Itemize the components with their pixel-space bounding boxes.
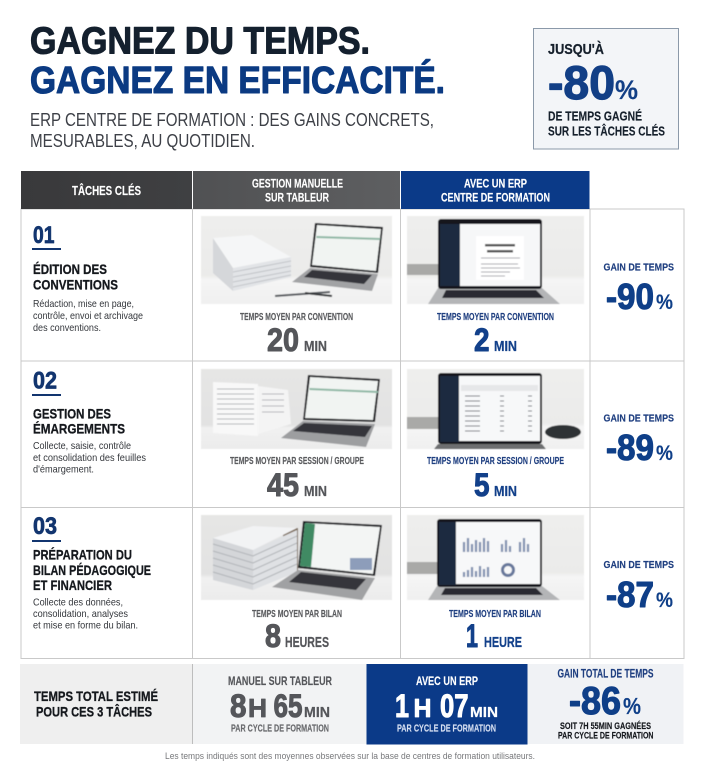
row 1 task description: 01 xyxy=(33,222,54,249)
row 1 image: paper stack and spreadsheet laptop xyxy=(201,216,392,304)
row 2 gain: -89 xyxy=(606,427,654,468)
total: manual: MANUEL SUR TABLEUR xyxy=(228,674,332,688)
total: manual: PAR CYCLE DE FORMATION xyxy=(231,724,329,735)
row 2 gain xyxy=(604,413,674,468)
row 2 task description: d'émargement. xyxy=(33,464,94,476)
row 1 manual time: TEMPS MOYEN PAR CONVENTION xyxy=(240,312,353,323)
row 1 gain: % xyxy=(656,291,673,314)
total: gain xyxy=(528,664,684,744)
row 3 image: large paper stack and laptop xyxy=(201,515,392,600)
row 2 task description: 02 xyxy=(33,368,57,395)
total: label: TEMPS TOTAL ESTIMÉ xyxy=(34,688,158,704)
title xyxy=(30,20,445,102)
row 3 task description xyxy=(32,513,151,632)
row 2 manual time: TEMPS MOYEN PAR SESSION / GROUPE xyxy=(230,456,364,467)
row 1 manual time: 20 xyxy=(267,322,299,358)
row 1 manual time xyxy=(240,312,353,358)
row 3 image: ERP laptop with dashboard xyxy=(407,515,584,600)
header: tâches clés xyxy=(21,171,192,209)
row 1 ERP time: TEMPS MOYEN PAR CONVENTION xyxy=(437,312,554,323)
title: GAGNEZ DU TEMPS. xyxy=(30,20,370,62)
row 2 gain: GAIN DE TEMPS xyxy=(604,413,674,425)
row 2 gain: % xyxy=(656,442,673,465)
row 3 ERP time: TEMPS MOYEN PAR BILAN xyxy=(449,609,541,620)
total: gain: SOIT 7H 55MIN GAGNÉES xyxy=(560,721,651,732)
row 3 gain: -87 xyxy=(606,574,654,615)
callout: jusqu'à -80%: DE TEMPS GAGNÉ xyxy=(548,108,642,124)
header: gestion manuelle: GESTION MANUELLE xyxy=(252,176,343,190)
row 1 gain: GAIN DE TEMPS xyxy=(604,262,674,274)
header: gestion manuelle: SUR TABLEUR xyxy=(265,190,329,204)
callout: jusqu'à -80%: -80 xyxy=(548,56,615,109)
row 1 task description: CONVENTIONS xyxy=(33,276,118,292)
callout: jusqu'à -80% xyxy=(534,28,678,149)
total: manual: H xyxy=(248,693,267,723)
total: ERP: 07 xyxy=(440,688,468,724)
row 1 manual time: MIN xyxy=(304,338,327,355)
row 3 ERP time xyxy=(449,609,541,654)
row 3 task description: consolidation, analyses xyxy=(33,608,128,620)
row 3 gain: GAIN DE TEMPS xyxy=(604,559,674,571)
total: manual: 65 xyxy=(274,688,302,724)
subtitle: MESURABLES, AU QUOTIDIEN. xyxy=(30,130,255,151)
row 2 task description xyxy=(32,368,146,476)
row 1 task description: ÉDITION DES xyxy=(33,261,107,277)
header: tâches clés: TÂCHES CLÉS xyxy=(72,183,141,198)
row 3 gain: % xyxy=(656,589,673,612)
total: ERP: 1 xyxy=(395,688,409,724)
row 2 manual time: MIN xyxy=(304,483,327,500)
row 3 gain xyxy=(604,559,674,615)
row 2 ERP time: MIN xyxy=(494,483,517,500)
total: ERP: PAR CYCLE DE FORMATION xyxy=(397,724,496,735)
footnote: Les temps indiqués sont des moyennes observées sur la base de centres de formation utilisateurs. xyxy=(165,751,535,761)
total: ERP: AVEC UN ERP xyxy=(416,674,478,688)
total: gain: PAR CYCLE DE FORMATION xyxy=(558,730,654,742)
row 1 ERP time: MIN xyxy=(494,338,517,355)
callout: jusqu'à -80%: % xyxy=(615,75,638,105)
total: gain: GAIN TOTAL DE TEMPS xyxy=(558,667,654,681)
row 1 gain xyxy=(604,262,674,317)
row 3 task description: 03 xyxy=(33,513,57,540)
row 1 ERP time: 2 xyxy=(474,322,490,358)
total: manual: MIN xyxy=(304,704,330,721)
row 1 ERP time xyxy=(437,312,554,358)
row 2 ERP time: 5 xyxy=(474,467,490,503)
total: manual: 8 xyxy=(230,688,246,724)
row 2 manual time xyxy=(230,456,364,503)
row 3 task description: ET FINANCIER xyxy=(33,577,112,593)
row 3 task description: BILAN PÉDAGOGIQUE xyxy=(33,562,151,578)
row 1 image: ERP laptop with document xyxy=(407,216,584,304)
row 3 task description: PRÉPARATION DU xyxy=(33,547,132,563)
total: manual xyxy=(192,664,367,744)
row 2 image: sign-in sheets and spreadsheet laptop xyxy=(201,369,392,449)
row 3 ERP time: HEURE xyxy=(484,634,522,651)
row 1 task description: contrôle, envoi et archivage xyxy=(33,310,143,322)
row 3 ERP time: 1 xyxy=(466,618,478,654)
total: gain: -86 xyxy=(569,680,621,723)
total: ERP: H xyxy=(414,693,432,723)
row 1 task description: Rédaction, mise en page, xyxy=(33,298,134,310)
row 1 task description: des conventions. xyxy=(33,322,101,334)
total: label: POUR CES 3 TÂCHES xyxy=(36,703,152,720)
total: label xyxy=(20,664,192,744)
row 2 task description: GESTION DES xyxy=(33,406,111,422)
header: avec un ERP: CENTRE DE FORMATION xyxy=(441,190,550,204)
header: avec un ERP xyxy=(401,171,590,209)
row 3 task description: et mise en forme du bilan. xyxy=(33,620,138,632)
row 1 task description xyxy=(32,222,143,334)
row 3 manual time: HEURES xyxy=(285,634,329,651)
callout: jusqu'à -80%: SUR LES TÂCHES CLÉS xyxy=(548,124,665,138)
row 2 task description: et consolidation des feuilles xyxy=(33,452,146,464)
callout: jusqu'à -80%: JUSQU'À xyxy=(548,41,604,58)
row 3 manual time: 8 xyxy=(265,618,281,654)
subtitle: ERP CENTRE DE FORMATION : DES GAINS CONCRETS, xyxy=(30,109,434,130)
row 2 ERP time xyxy=(427,456,564,503)
total: ERP xyxy=(366,664,528,744)
row 3 manual time: TEMPS MOYEN PAR BILAN xyxy=(252,609,342,620)
row 2 image: ERP laptop with attendance list xyxy=(407,369,584,449)
subtitle xyxy=(30,109,434,151)
total: ERP: MIN xyxy=(470,704,498,721)
row 2 task description: ÉMARGEMENTS xyxy=(33,421,125,437)
table grid xyxy=(21,209,684,658)
row 2 task description: Collecte, saisie, contrôle xyxy=(33,440,131,452)
header: gestion manuelle xyxy=(193,171,400,209)
row 3 task description: Collecte des données, xyxy=(33,597,123,609)
title: GAGNEZ EN EFFICACITÉ. xyxy=(30,58,445,102)
row 3 manual time xyxy=(252,609,342,654)
row 1 gain: -90 xyxy=(606,276,654,317)
total: gain: % xyxy=(623,693,641,719)
row 2 ERP time: TEMPS MOYEN PAR SESSION / GROUPE xyxy=(427,456,564,467)
row 2 manual time: 45 xyxy=(267,467,299,503)
header: avec un ERP: AVEC UN ERP xyxy=(464,176,527,190)
